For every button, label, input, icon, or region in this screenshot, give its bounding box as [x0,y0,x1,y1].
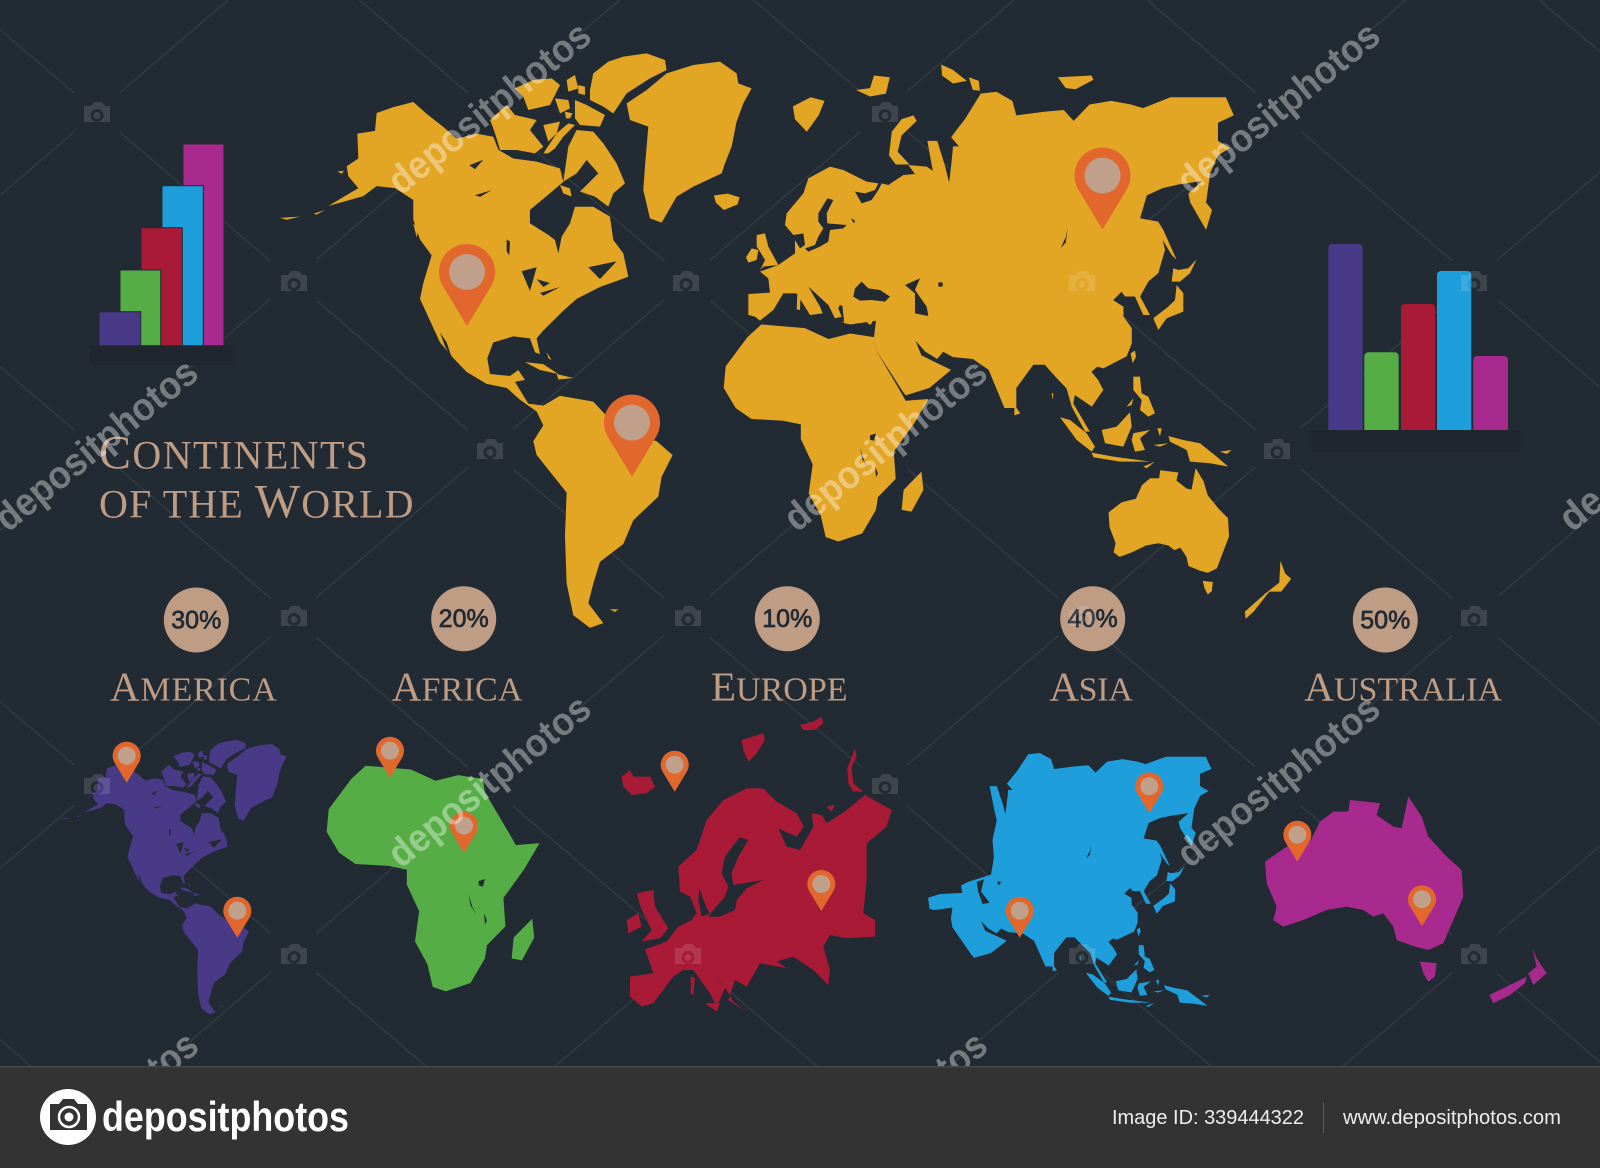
small map: Europe [622,717,892,1012]
watermark text: tos [927,1023,996,1090]
small map: America [60,740,287,1014]
small map: Africa [327,737,540,991]
watermark text: tos [138,1023,207,1090]
stat: Europe 10% [755,586,820,651]
continent: Australia [1109,468,1229,595]
label: Europe: EUROPE [711,664,848,710]
stat: Australia 50%: 50% [1360,606,1410,634]
pin: India [1006,897,1034,938]
stat: Australia 50% [1353,588,1418,652]
pin: Alaska [113,742,141,783]
stat: Europe 10%: 10% [762,605,812,633]
pin: Russia [807,870,835,911]
pin: Algeria [376,737,404,778]
New Zealand small [1489,948,1547,1003]
map pin: South America [604,395,660,477]
label: Australia: AUSTRALIA [1304,664,1502,710]
stat: Africa 20% [431,586,496,651]
label: America: AMERICA [110,664,277,710]
world map [280,53,1291,628]
continent: Americas and Greenland [280,53,752,628]
map pin: North America [439,244,495,326]
label: Africa: AFRICA [392,664,523,710]
pin: Western Australia [1283,821,1311,862]
title: OF THE WORLD [99,476,415,529]
stepped bar chart [90,144,233,365]
stat: America 30%: 30% [171,606,221,634]
website: www.depositphotos.com [1342,1107,1561,1129]
image id: Image ID: 339444322 [1112,1107,1304,1129]
continent: Europe [714,65,1093,325]
small map: Australia [1265,797,1547,1003]
pin: Iceland [661,751,689,792]
watermark text: depositphotos [380,14,599,203]
logo icon [40,1089,96,1145]
label: Asia: ASIA [1049,664,1133,710]
watermark text: depositphotos [1169,687,1388,876]
pin: New South Wales [1408,885,1436,926]
New Zealand [1245,561,1291,619]
watermark text: depositphotos [380,687,599,876]
continent: Africa [724,324,929,541]
pin: Sudan [450,812,478,853]
watermark cameras [84,102,1487,964]
map pin: Asia [1074,148,1130,230]
rounded bar chart [1312,244,1521,452]
watermark text: depositphotos [776,351,995,540]
pin: Brazil [223,897,251,938]
stat: Asia 40% [1060,586,1125,651]
continent: Asia [842,92,1234,468]
footer bar [0,1066,1600,1168]
stat: Asia 40%: 40% [1068,605,1118,633]
title: CONTINENTS [99,426,369,479]
logo wordmark: depositphotos [102,1093,349,1140]
pin: Siberia [1135,772,1163,813]
stat: America 30% [164,588,229,652]
small map: Asia [928,753,1212,1007]
watermark text: depositphotos [1169,14,1388,203]
stat: Africa 20%: 20% [439,605,489,633]
title [99,426,415,529]
